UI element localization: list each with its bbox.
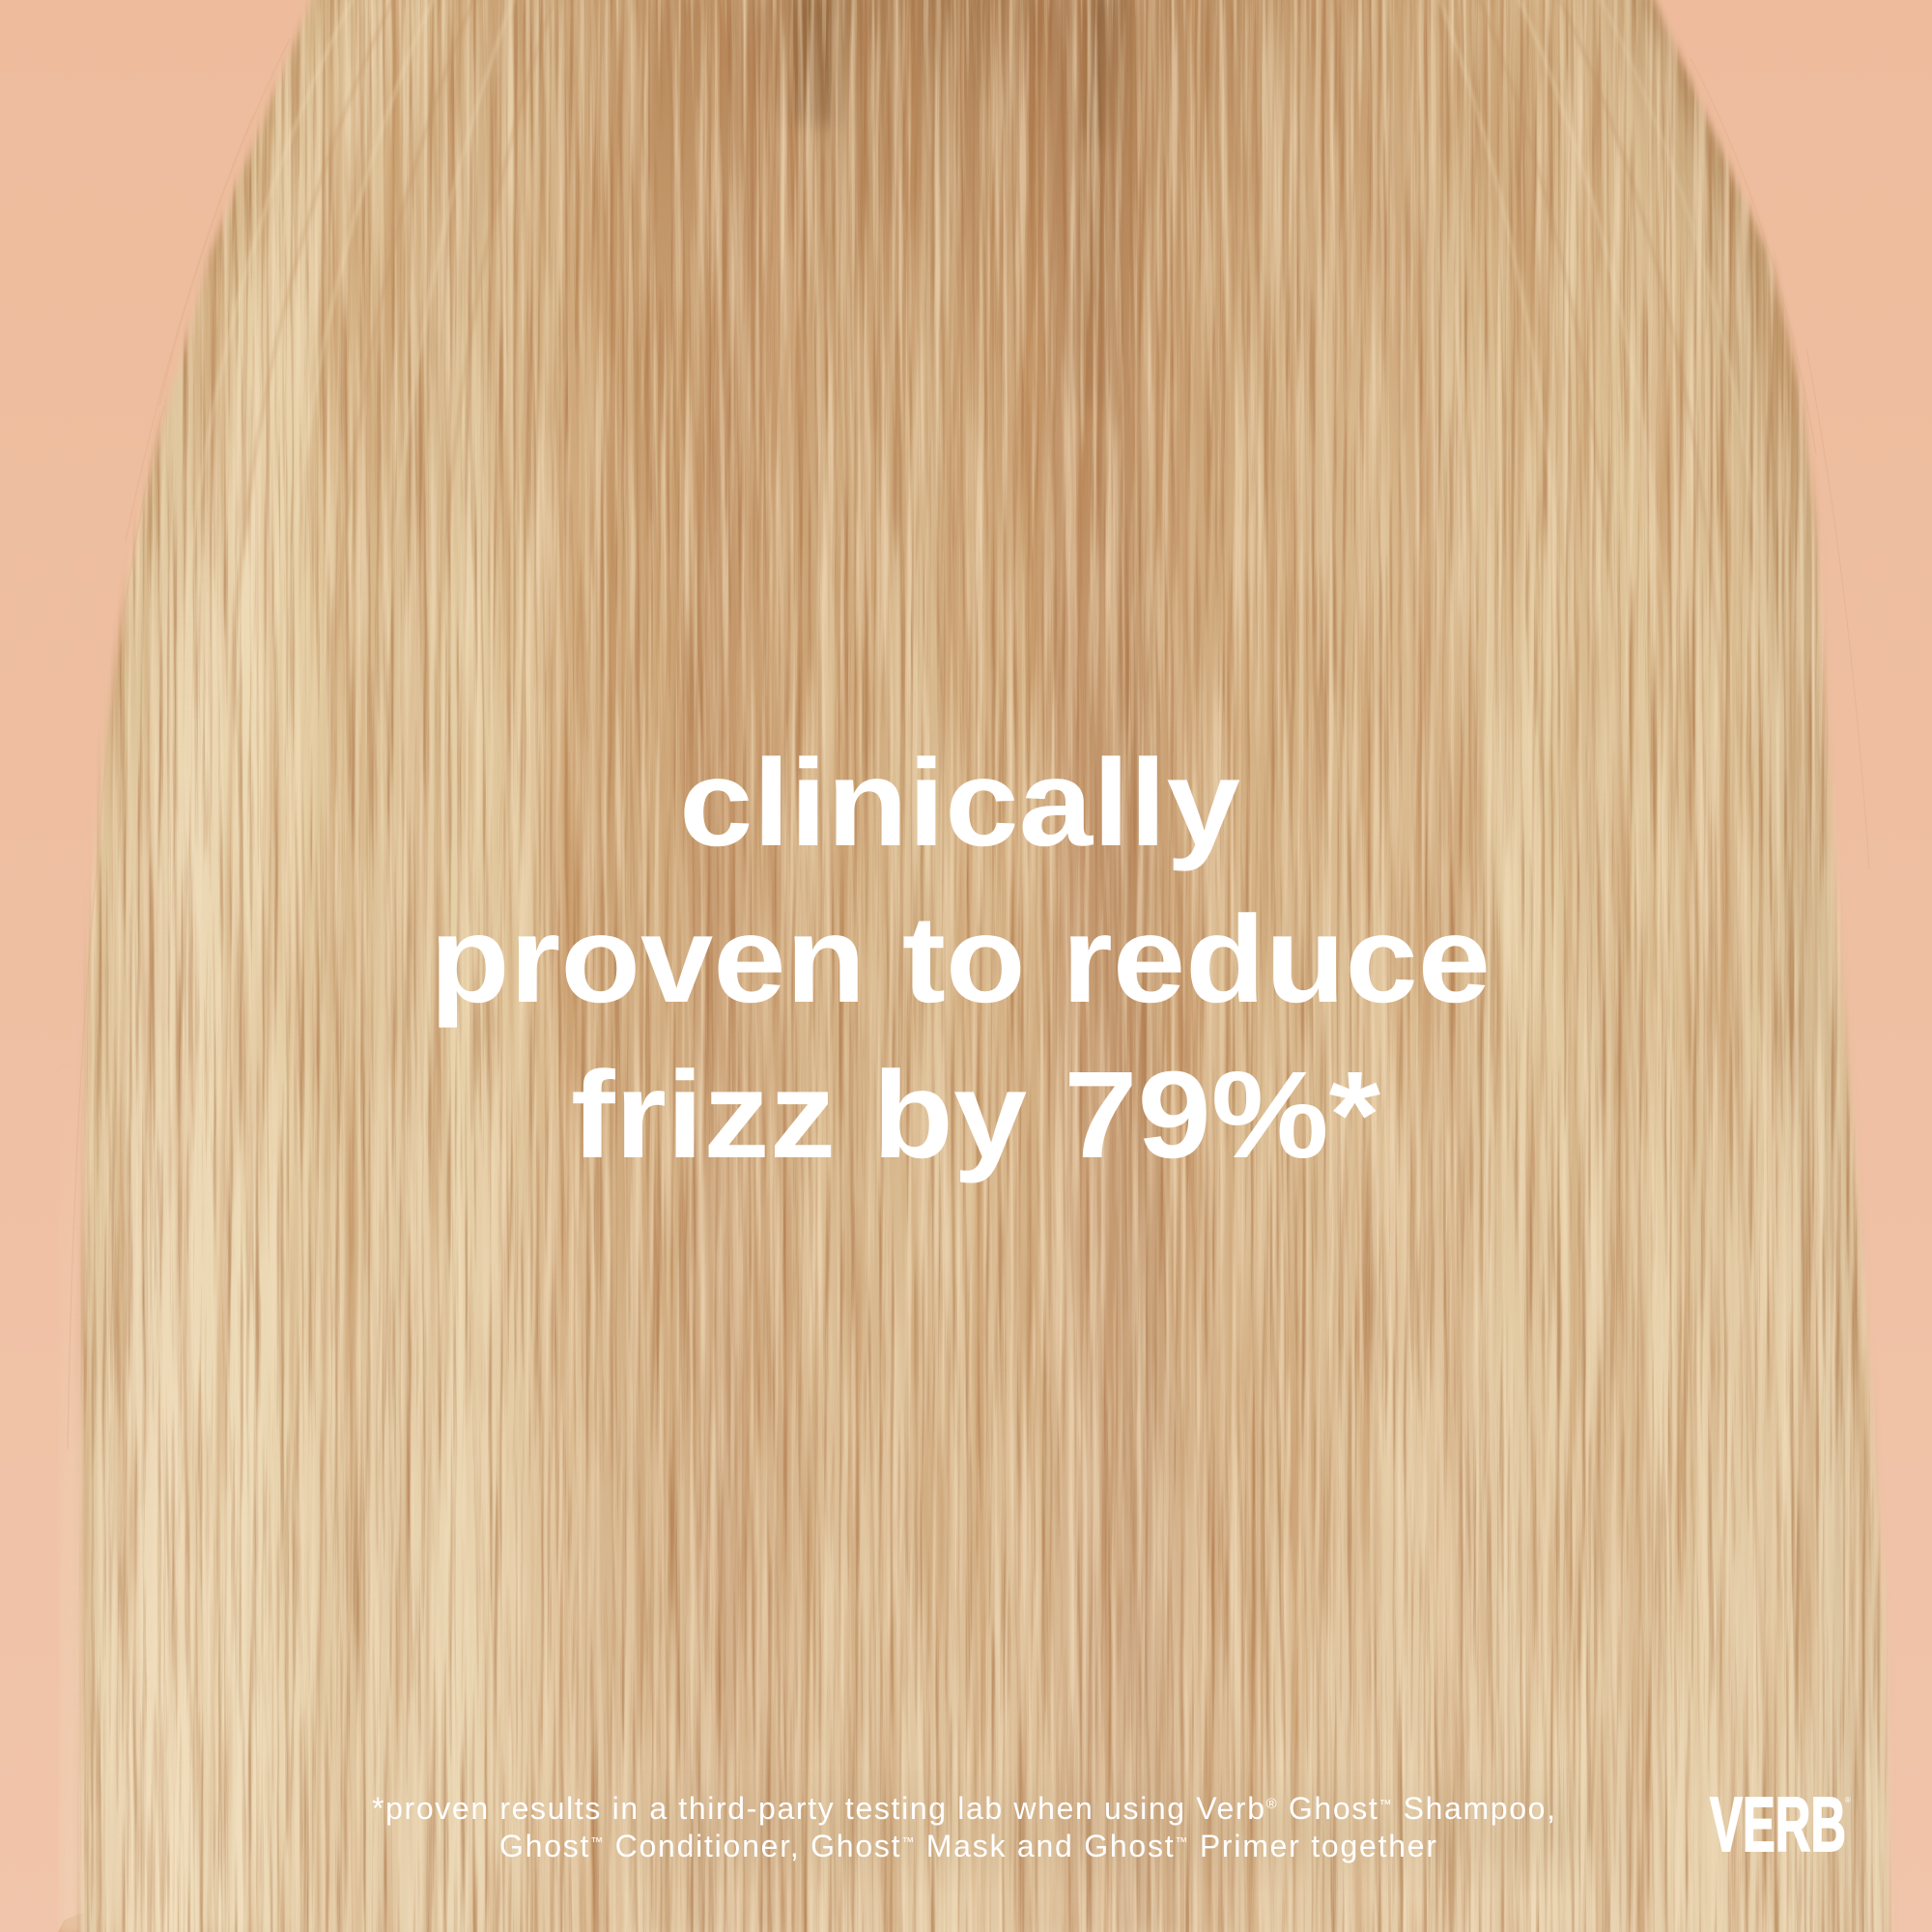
footnote: testing disclaimer: Ghost [499, 1829, 588, 1863]
footnote: testing disclaimer: ™ [590, 1834, 603, 1849]
footnote: testing disclaimer [372, 1791, 1555, 1863]
title: clinically proven to reduce frizz by 79%*: proven to reduce [430, 891, 1491, 1029]
logo: VERB wordmark: ® [1845, 1796, 1851, 1804]
darker patch behind footnote [638, 1804, 1567, 1859]
footnote: testing disclaimer: Mask and Ghost [916, 1829, 1174, 1863]
footnote: testing disclaimer: ™ [901, 1834, 914, 1849]
footnote: testing disclaimer: ™ [1378, 1797, 1391, 1811]
icon: shoulder sliver at lower left [58, 1909, 92, 1932]
logo: VERB wordmark [1710, 1781, 1851, 1867]
footnote: testing disclaimer: ® [1266, 1796, 1277, 1812]
footnote: testing disclaimer: Conditioner, Ghost [605, 1829, 900, 1863]
footnote: testing disclaimer: Shampoo, [1393, 1791, 1555, 1826]
title: clinically proven to reduce frizz by 79%*: frizz by 79%* [571, 1046, 1380, 1184]
title: clinically proven to reduce frizz by 79%* [430, 734, 1491, 1184]
footnote: testing disclaimer: *proven results in a third-party testing lab when using Verb [372, 1791, 1264, 1826]
title: clinically proven to reduce frizz by 79%*: clinically [679, 734, 1240, 872]
footnote: testing disclaimer: ™ [1175, 1834, 1187, 1849]
footnote: testing disclaimer: Ghost [1278, 1791, 1378, 1826]
footnote: testing disclaimer: Primer together [1189, 1829, 1436, 1863]
logo: VERB wordmark: VERB [1710, 1781, 1846, 1867]
